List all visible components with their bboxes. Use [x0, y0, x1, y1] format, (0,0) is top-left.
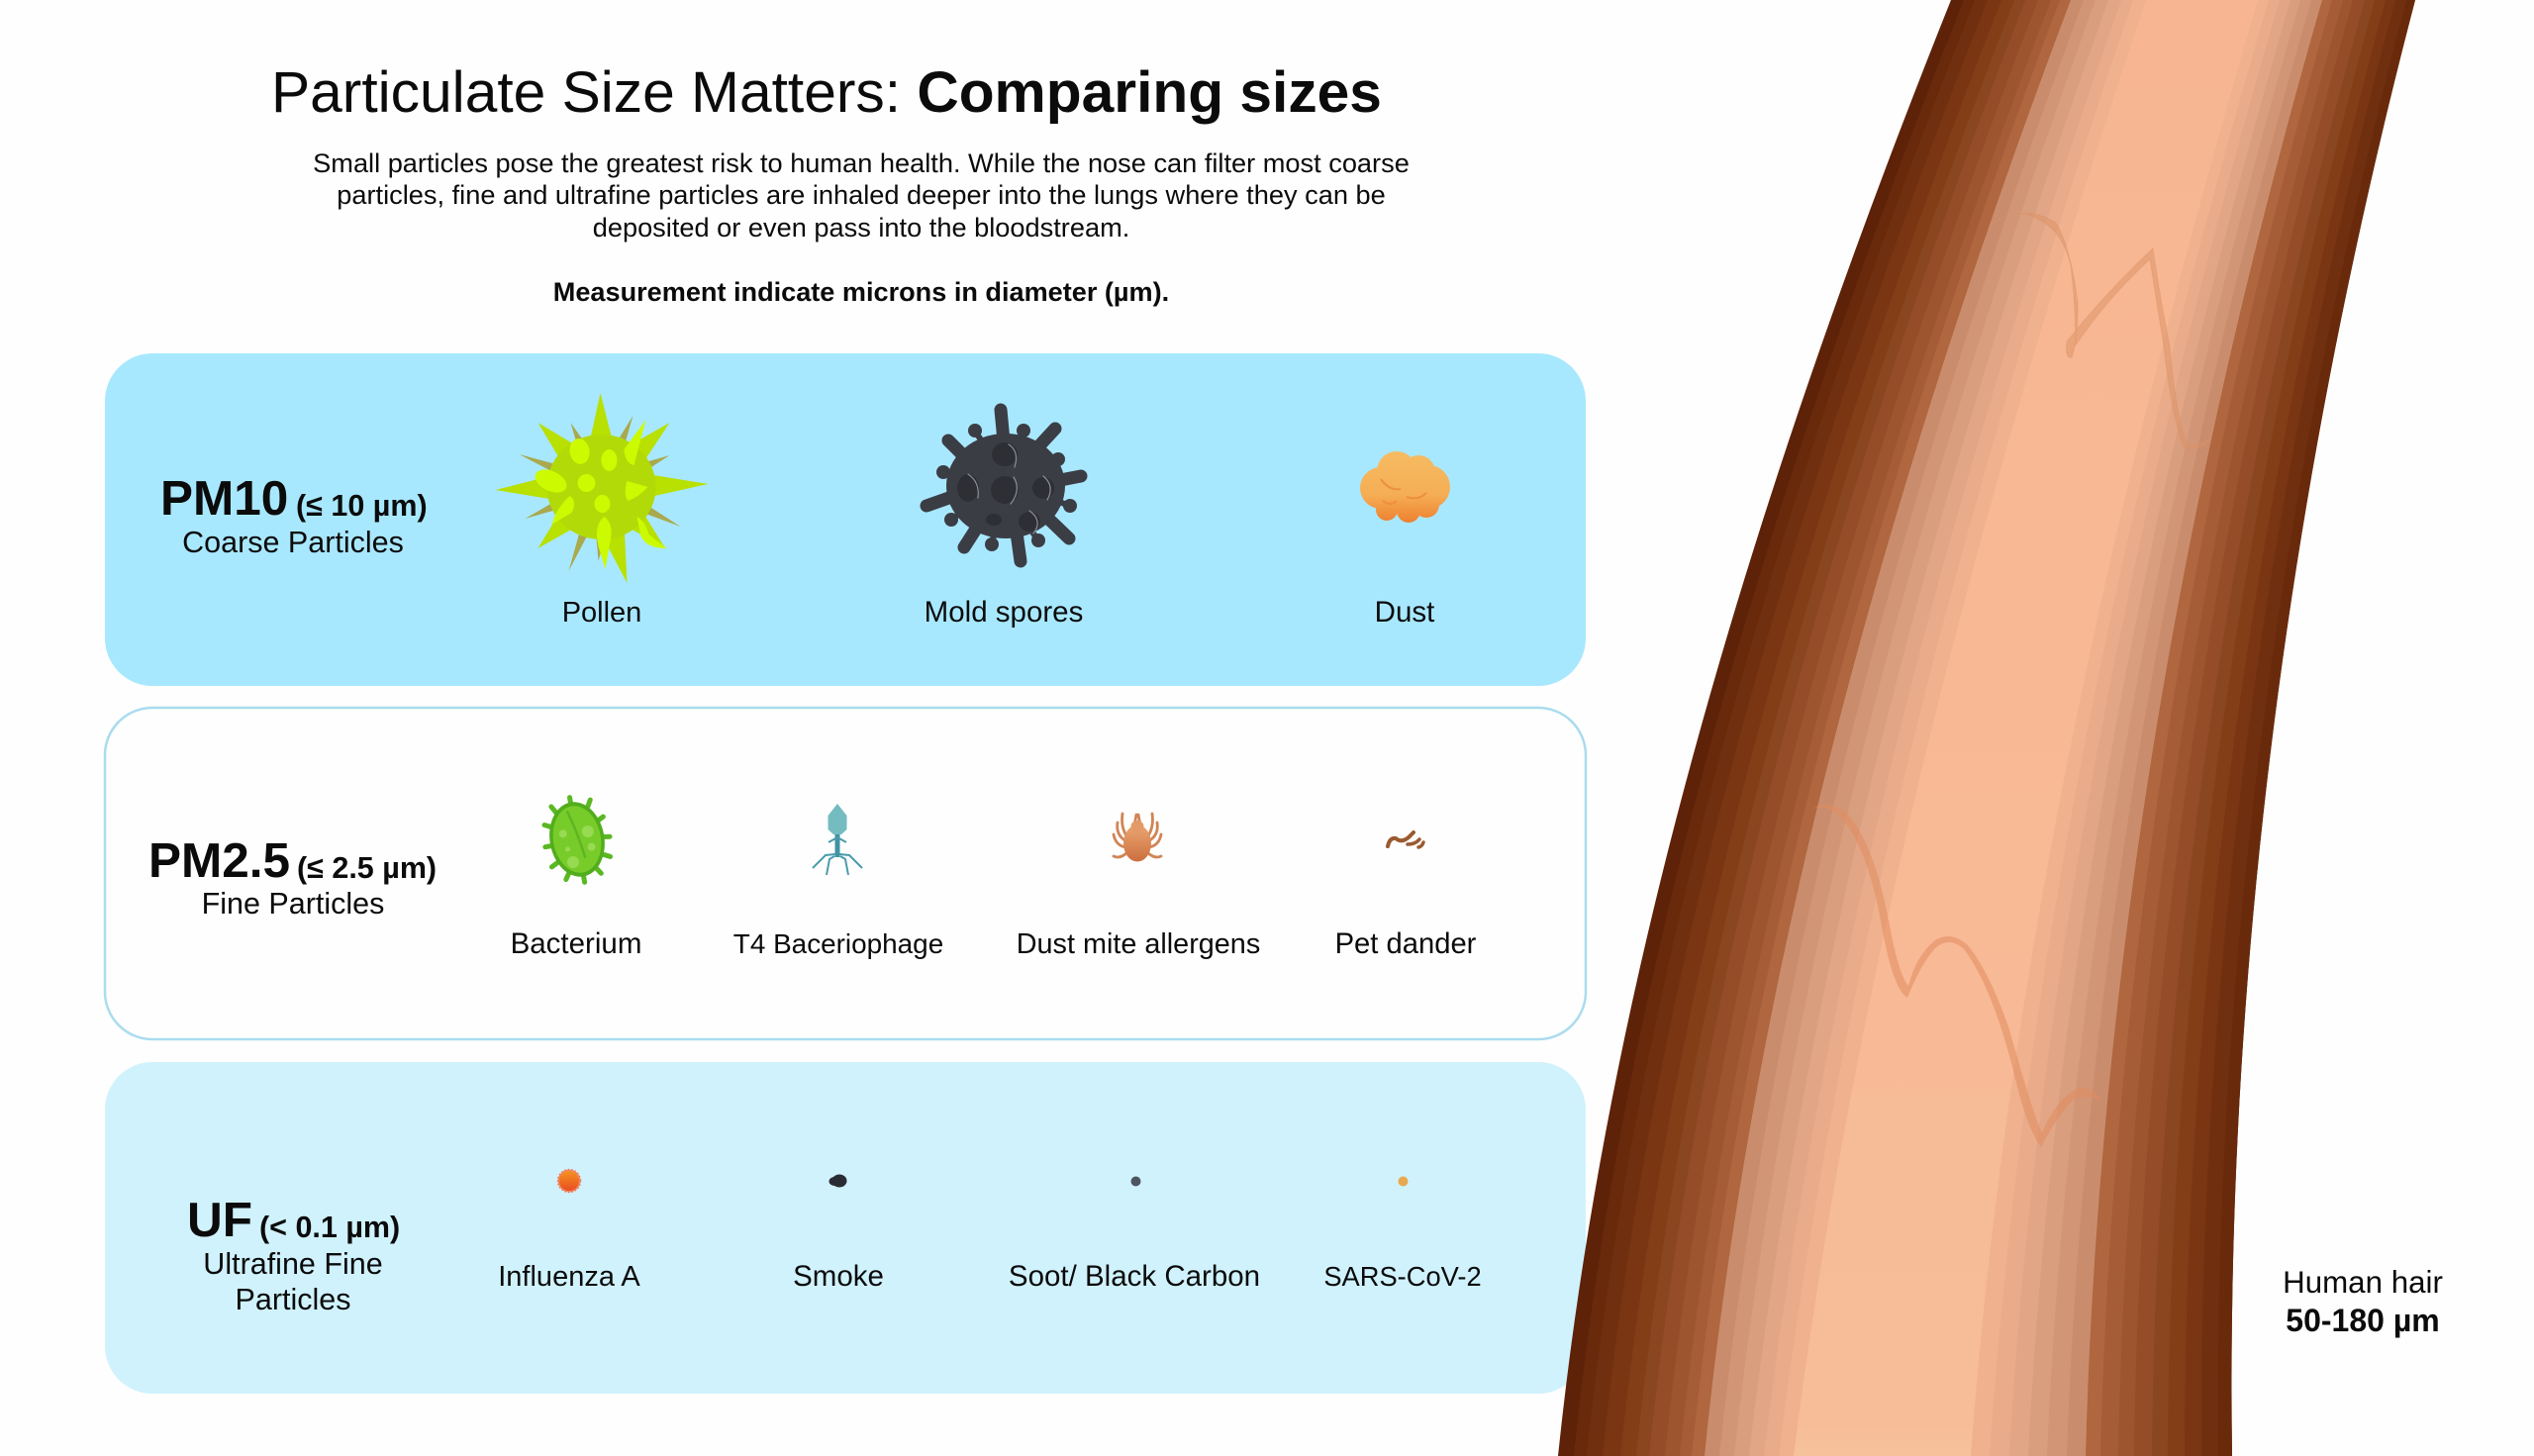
heading: PM10: [160, 471, 428, 559]
label: soot: Soot/ Black Carbon: [1009, 1260, 1260, 1293]
hair scale wrinkle: lower: [1812, 805, 2102, 1147]
heading: PM10: PM10: [160, 471, 288, 526]
heading: PM2.5: (≤ 2.5 µm): [297, 851, 437, 885]
title: Particulate Size Matters: Comparing sizes: [271, 60, 1382, 125]
icon: dust: [1360, 451, 1450, 523]
label: pollen: Pollen: [562, 597, 641, 629]
panel: PM2.5: [105, 708, 1586, 1039]
hair scale wrinkle: upper: [1990, 213, 2210, 448]
intro text: Small particles pose the greatest risk to human health. While the nose can filter most coarse: [313, 147, 1410, 178]
measurement note: Measurement indicate microns in diameter (µm).: [553, 276, 1169, 307]
intro text: deposited or even pass into the bloodstream.: [593, 212, 1129, 243]
label: human hair: Human hair: [2283, 1265, 2443, 1300]
icon: influenza A: [558, 1170, 580, 1192]
intro text: [313, 147, 1410, 243]
heading: UF: (< 0.1 µm): [259, 1211, 400, 1244]
label: dust: Dust: [1375, 596, 1434, 629]
icon: soot: [1130, 1176, 1140, 1186]
icon: SARS-CoV-2: [1398, 1176, 1408, 1186]
icon: pet dander: [1388, 832, 1423, 847]
label: human hair: [2283, 1265, 2443, 1338]
heading: PM2.5: PM2.5: [148, 833, 290, 888]
label: dust mite allergens: Dust mite allergens: [1017, 928, 1260, 960]
intro text: particles, fine and ultrafine particles are inhaled deeper into the lungs where they can be: [337, 179, 1386, 210]
icon: dust mite: [1114, 814, 1161, 861]
label: T4 bacteriophage: T4 Baceriophage: [733, 928, 943, 959]
heading: PM10: (≤ 10 µm): [296, 489, 428, 523]
label: influenza A: Influenza A: [498, 1261, 640, 1293]
label: smoke: Smoke: [793, 1260, 884, 1293]
icon: smoke: [829, 1174, 847, 1188]
icon: mold spore: [926, 410, 1081, 561]
label: mold spores: Mold spores: [925, 596, 1083, 629]
heading: PM2.5: Fine Particles: [202, 887, 384, 921]
label: human hair: 50-180 µm: [2286, 1303, 2440, 1338]
icon: pollen: [495, 393, 709, 583]
heading: UF: Ultrafine Fine: [203, 1247, 383, 1281]
icon: bacterium: [537, 792, 617, 888]
panel: PM10: [105, 353, 1586, 686]
heading: PM10: Coarse Particles: [182, 526, 404, 559]
label: pet dander: Pet dander: [1335, 928, 1477, 960]
panel: UF: [105, 1062, 1586, 1394]
human hair: [1558, 0, 2415, 1456]
heading: UF: [187, 1193, 400, 1316]
icon: T4 bacteriophage: [813, 804, 862, 875]
heading: UF: UF: [187, 1193, 252, 1247]
label: bacterium: Bacterium: [511, 927, 641, 960]
heading: UF: Particles: [236, 1283, 350, 1316]
label: SARS-CoV-2: SARS-CoV-2: [1323, 1261, 1482, 1292]
heading: PM2.5: [148, 833, 437, 921]
